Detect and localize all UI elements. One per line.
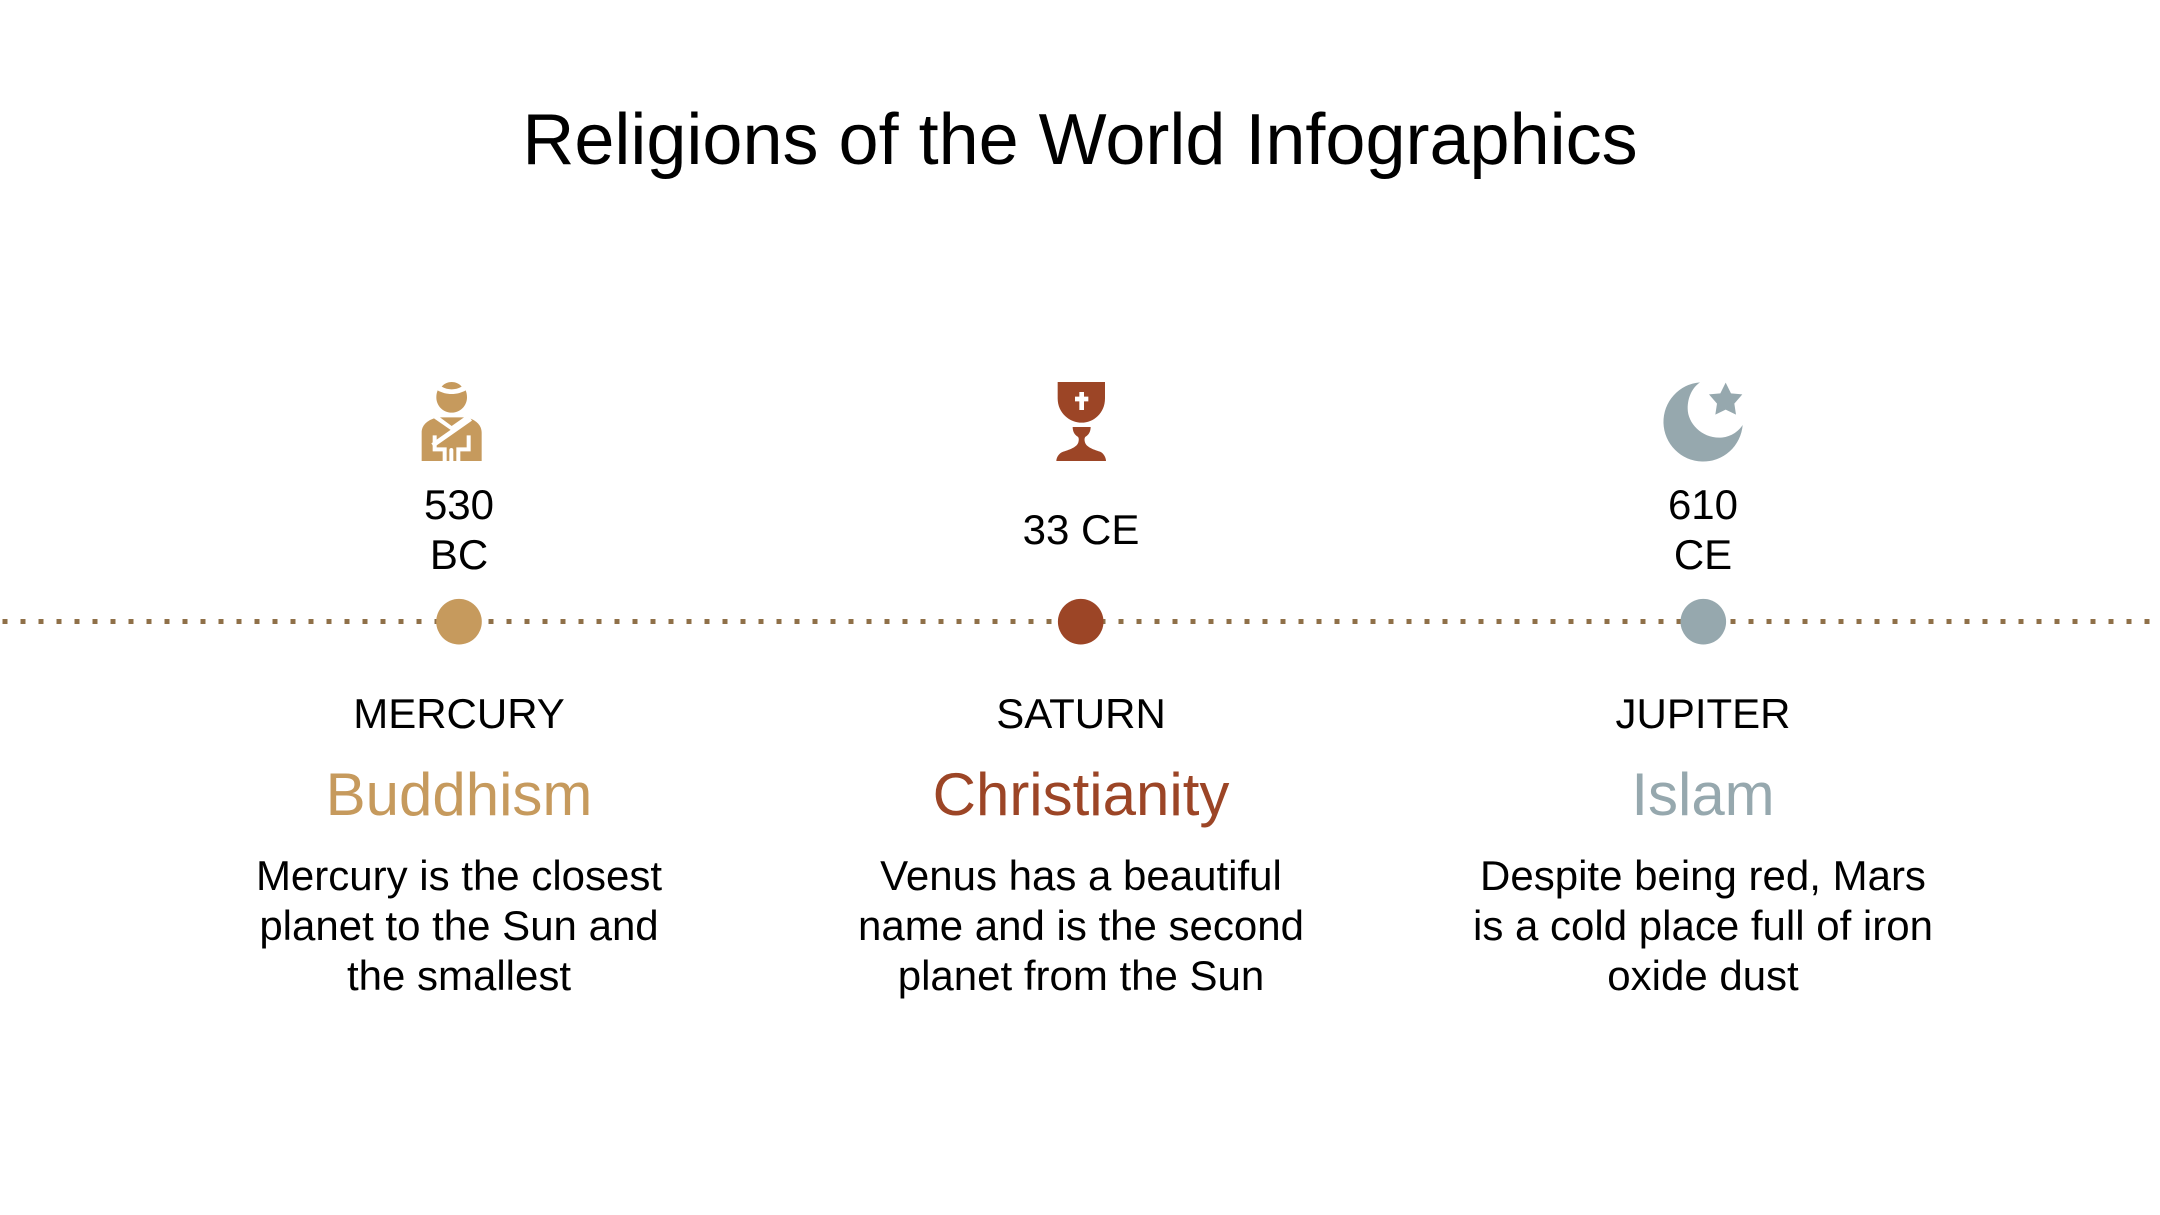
religion name: Christianity xyxy=(933,761,1229,828)
planet label: SATURN xyxy=(996,690,1166,737)
description: Mercury is the closest xyxy=(256,852,662,899)
title: Religions of the World Infographics xyxy=(522,100,1638,180)
marker xyxy=(1680,599,1726,644)
description: Despite being red, Mars xyxy=(1480,852,1926,899)
date xyxy=(424,481,494,578)
description: planet from the Sun xyxy=(898,952,1264,999)
description: Venus has a beautiful xyxy=(880,852,1282,899)
description xyxy=(858,852,1304,999)
date: 530 xyxy=(424,481,494,528)
date: 33 CE xyxy=(1023,506,1139,553)
religion name: Buddhism xyxy=(326,761,592,828)
description: the smallest xyxy=(347,952,571,999)
planet label: JUPITER xyxy=(1615,690,1791,737)
panel: Islam xyxy=(1473,382,1933,999)
description: name and is the second xyxy=(858,902,1304,949)
description xyxy=(256,852,662,999)
date: BC xyxy=(430,531,488,578)
date: 610 xyxy=(1668,481,1738,528)
panel: Christianity xyxy=(858,382,1304,999)
timeline dotted line xyxy=(2,619,2160,624)
panel: Buddhism xyxy=(256,382,662,999)
planet label: MERCURY xyxy=(353,690,565,737)
date xyxy=(1668,481,1738,578)
description: is a cold place full of iron xyxy=(1473,902,1933,949)
description: planet to the Sun and xyxy=(259,902,659,949)
icon: chalice xyxy=(1056,382,1106,461)
description xyxy=(1473,852,1933,999)
icon: monk xyxy=(422,382,482,463)
marker xyxy=(436,599,482,644)
description: oxide dust xyxy=(1607,952,1799,999)
icon: crescent and star xyxy=(1663,382,1743,462)
date: CE xyxy=(1674,531,1732,578)
religion name: Islam xyxy=(1631,761,1775,828)
marker xyxy=(1058,599,1103,644)
